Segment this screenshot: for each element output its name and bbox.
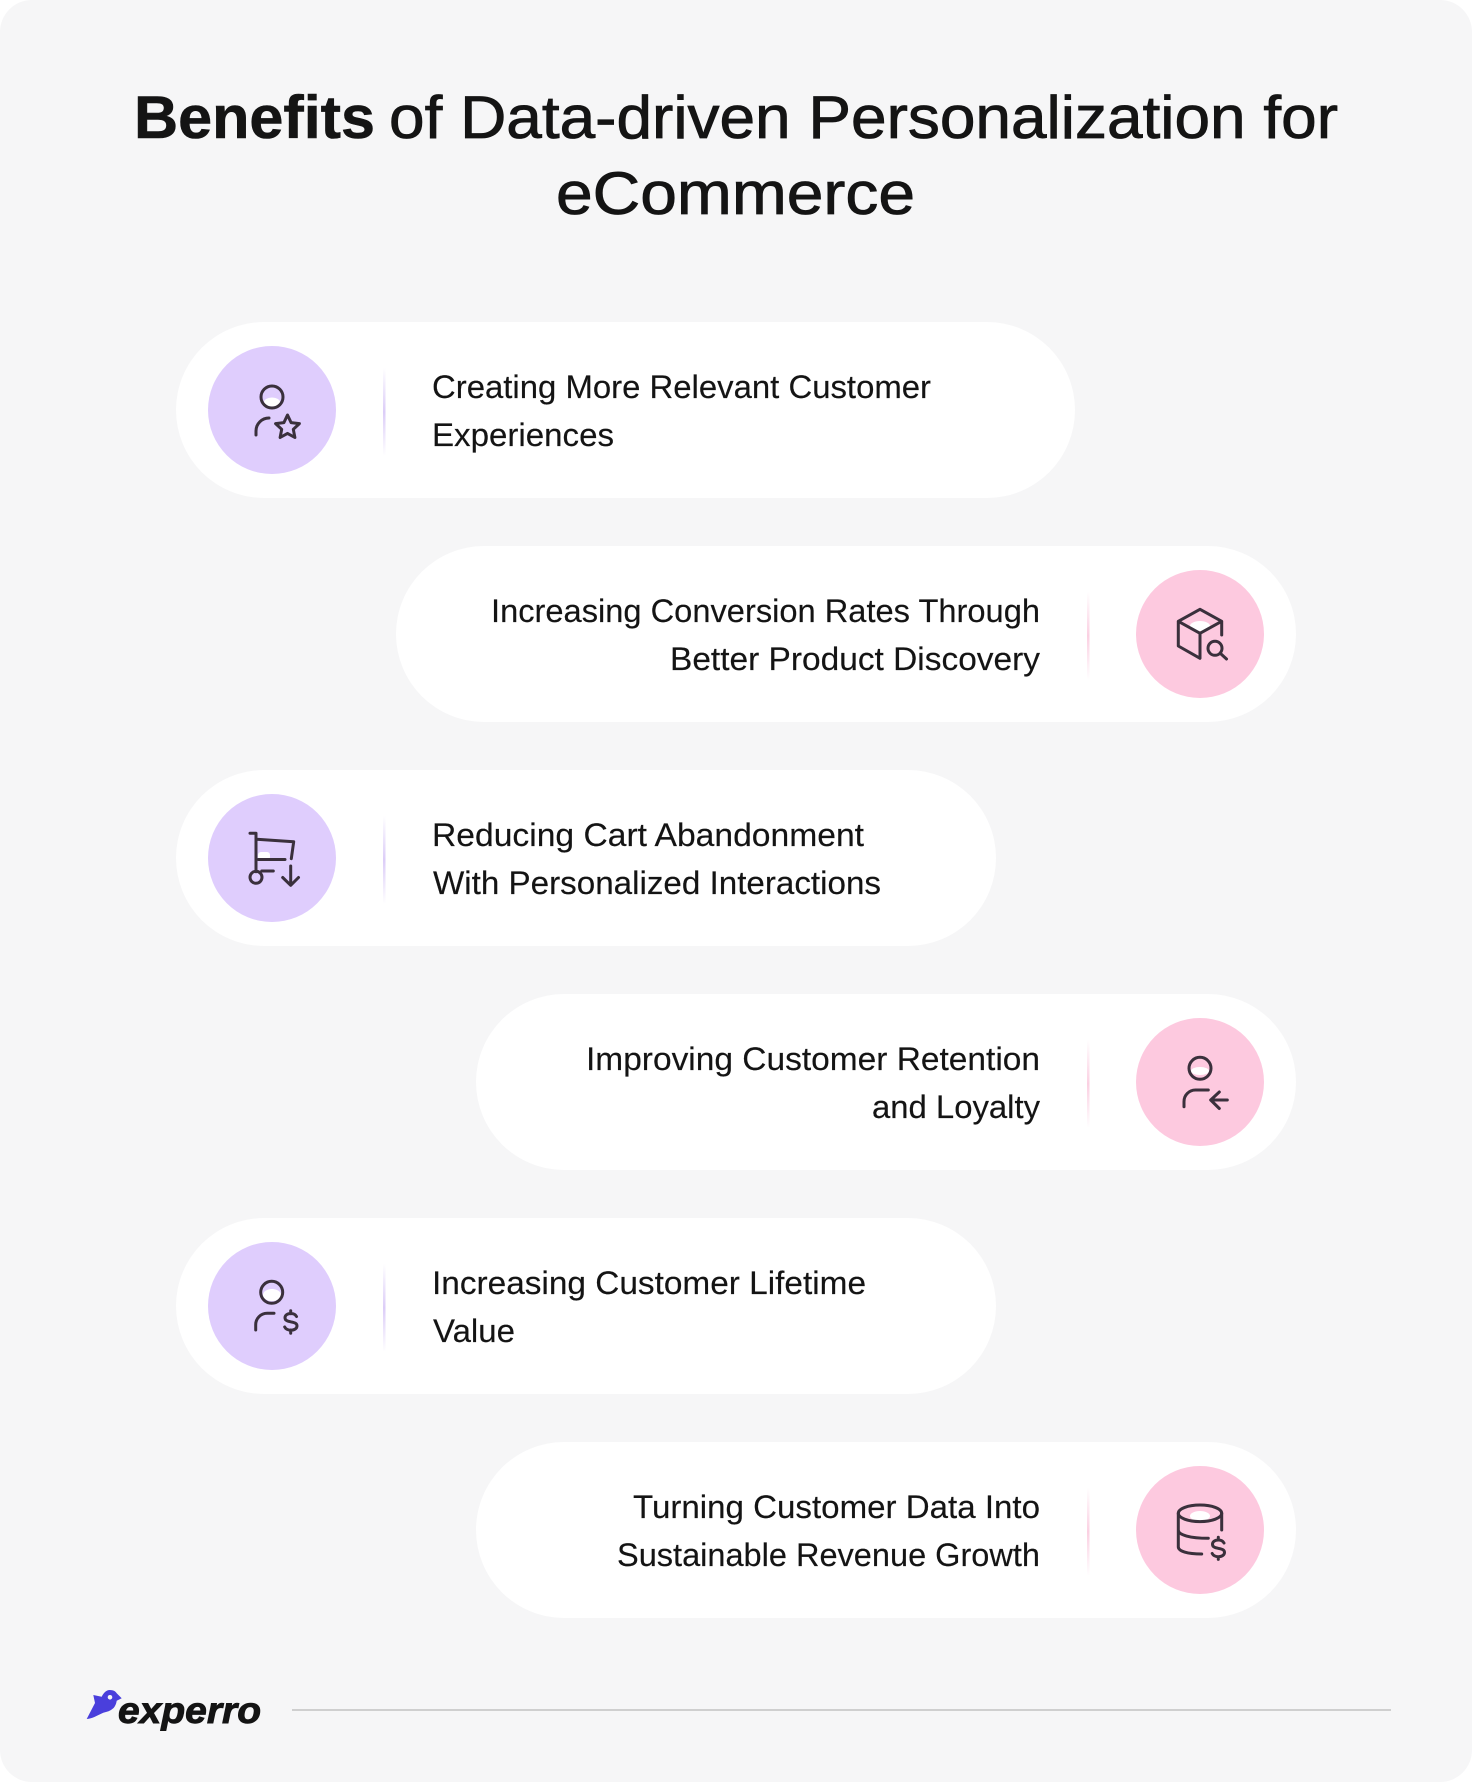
logo: experro: experro [118,1690,261,1731]
title: eCommerce [556,160,915,227]
panel: creating more relevant customer experiences [176,322,1075,498]
text: turning customer data into revenue [617,1489,1040,1573]
panel: increasing customer lifetime value [176,1218,996,1394]
text: increasing customer lifetime value: Increasing Customer Lifetime [432,1265,866,1301]
text: increasing customer lifetime value [432,1265,866,1349]
text: turning customer data into revenue: Sustainable Revenue Growth [617,1537,1040,1573]
text: improving customer retention: and Loyalty [872,1089,1040,1125]
text: increasing conversion rates [491,593,1040,677]
panel: reducing cart abandonment [176,770,996,946]
icon: blue bird [87,1690,122,1719]
icon: cart with down arrow [208,794,336,922]
title [134,84,1338,227]
text: reducing cart abandonment [432,817,881,901]
text: turning customer data into revenue: Turning Customer Data Into [633,1489,1040,1525]
icon: customer with dollar sign [208,1242,336,1370]
text: creating more relevant customer experiences: Creating More Relevant Customer [432,369,931,405]
text: improving customer retention: Improving Customer Retention [586,1041,1040,1077]
text: improving customer retention [586,1041,1040,1125]
text: creating more relevant customer experiences: Experiences [432,417,614,453]
icon: product box with magnifier [1136,570,1264,698]
icon: customer with star [208,346,336,474]
text: creating more relevant customer experiences [432,369,931,453]
title: Benefits [134,84,375,151]
icon: customer with return arrow [1136,1018,1264,1146]
text: increasing conversion rates: Increasing Conversion Rates Through [491,593,1040,629]
icon: database with dollar sign [1136,1466,1264,1594]
title: of Data-driven Personalization for [389,84,1338,151]
panel: turning customer data into revenue [476,1442,1296,1618]
text: reducing cart abandonment: With Personalized Interactions [433,865,881,901]
text: increasing conversion rates: Better Product Discovery [670,641,1040,677]
text: increasing customer lifetime value: Value [433,1313,515,1349]
panel: improving customer retention [476,994,1296,1170]
text: reducing cart abandonment: Reducing Cart Abandonment [432,817,864,853]
panel: increasing conversion rates [396,546,1296,722]
